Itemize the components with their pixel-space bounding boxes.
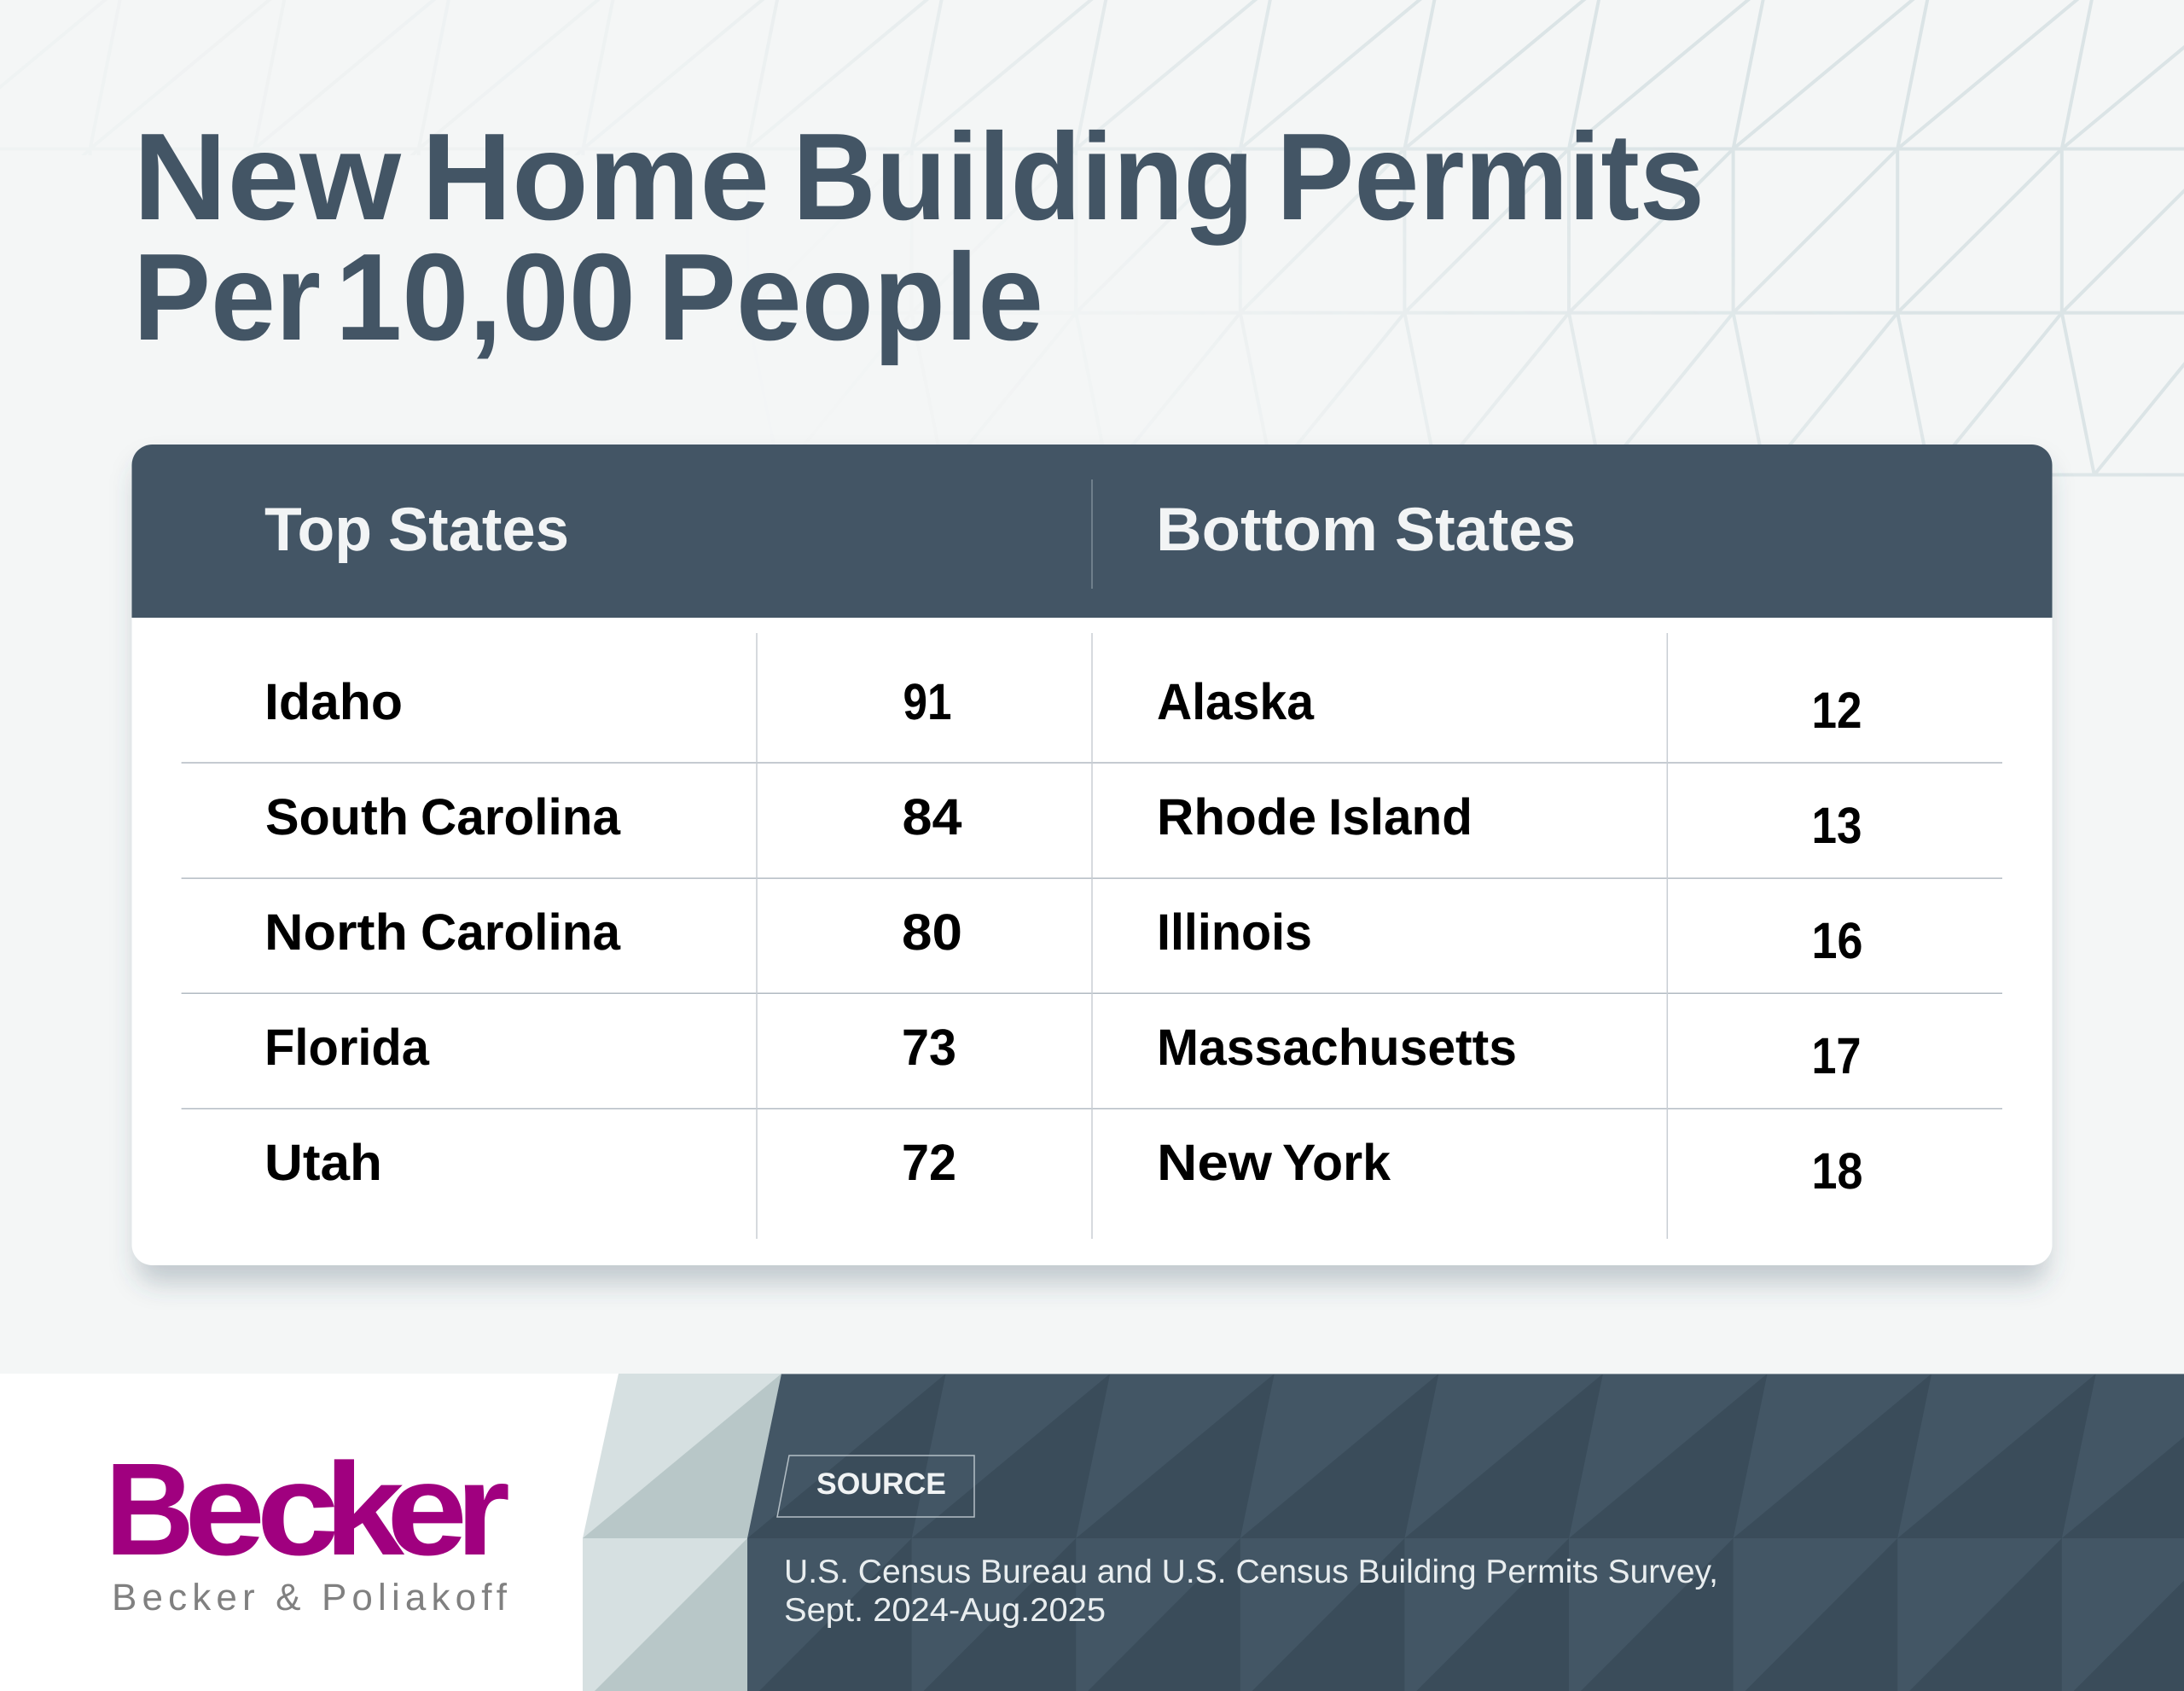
title: Building [793,108,1254,246]
row: North Carolina 80 [264,904,962,961]
row: Utah 72: 72 [902,1134,956,1191]
title: Per [133,228,321,366]
logo: Becker & Poliakoff: r [456,1436,510,1583]
row: Rhode Island 13: Island [1328,788,1472,846]
logo: Becker & Poliakoff: B [105,1436,195,1583]
row: Illinois 16: 16 [1812,912,1863,969]
row: Alaska 12: 12 [1812,682,1862,739]
row: Rhode Island 13 [1157,788,1862,854]
heading: bottom states [1156,496,1576,564]
heading: top states [264,496,569,564]
logo: Becker & Poliakoff: k [324,1436,404,1583]
source tag: SOURCE [816,1467,946,1501]
row: North Carolina 80: Carolina [421,904,621,961]
heading: bottom states: States [1395,496,1576,564]
row: South Carolina 84: 84 [903,788,962,846]
row: Illinois 16: Illinois [1157,904,1312,961]
row: South Carolina 84 [265,788,962,846]
row: Rhode Island 13: 13 [1812,797,1862,854]
logo: Becker & Poliakoff [105,1436,510,1618]
footer light geometric band [583,1374,781,1691]
row: Alaska 12 [1157,673,1862,739]
row: Rhode Island 13: Rhode [1157,788,1316,846]
source tag [777,1456,974,1517]
row: North Carolina 80: 80 [902,904,962,961]
row: New York 18: York [1282,1134,1391,1191]
row: Massachusetts 17: 17 [1812,1027,1862,1084]
heading: top states: Top [264,496,372,564]
title: 10,00 [335,228,636,366]
logo: Becker & Poliakoff: e [386,1436,468,1583]
logo: Becker & Poliakoff: e [184,1436,265,1583]
logo: Becker & Poliakoff: Becker & Poliakoff [112,1577,508,1618]
row: Florida 73: Florida [264,1019,430,1076]
source text [784,1554,1718,1629]
title: People [658,228,1043,366]
row: New York 18: New [1157,1134,1272,1191]
row: Florida 73 [264,1019,956,1076]
title [133,108,1705,366]
row: Idaho 91: 91 [903,673,952,730]
row: North Carolina 80: North [264,904,408,961]
row: Utah 72 [264,1134,956,1191]
row: Idaho 91: Idaho [264,673,403,730]
footer dark geometric band [747,1374,2184,1691]
row: Utah 72: Utah [264,1134,382,1191]
source text: U.S. Census Bureau and U.S. Census Building Permits Survey, [784,1554,1718,1590]
row: Florida 73: 73 [902,1019,956,1076]
row: New York 18 [1157,1134,1863,1200]
logo: Becker & Poliakoff: c [256,1436,340,1583]
title: New [133,108,402,246]
panel: states table [131,445,2053,1265]
row: Alaska 12: Alaska [1157,673,1315,730]
row: Idaho 91 [264,673,952,730]
row: South Carolina 84: South [265,788,409,846]
title: Home [421,108,770,246]
row: Massachusetts 17 [1157,1019,1862,1084]
heading: bottom states: Bottom [1156,496,1378,564]
row: Illinois 16 [1157,904,1863,969]
row: Massachusetts 17: Massachusetts [1157,1019,1517,1076]
panel: footer [0,1374,2184,1691]
row: South Carolina 84: Carolina [421,788,621,846]
source text: Sept. 2024-Aug.2025 [784,1592,1106,1629]
heading: top states: States [388,496,569,564]
row: New York 18: 18 [1812,1142,1863,1200]
title: Permits [1276,108,1705,246]
